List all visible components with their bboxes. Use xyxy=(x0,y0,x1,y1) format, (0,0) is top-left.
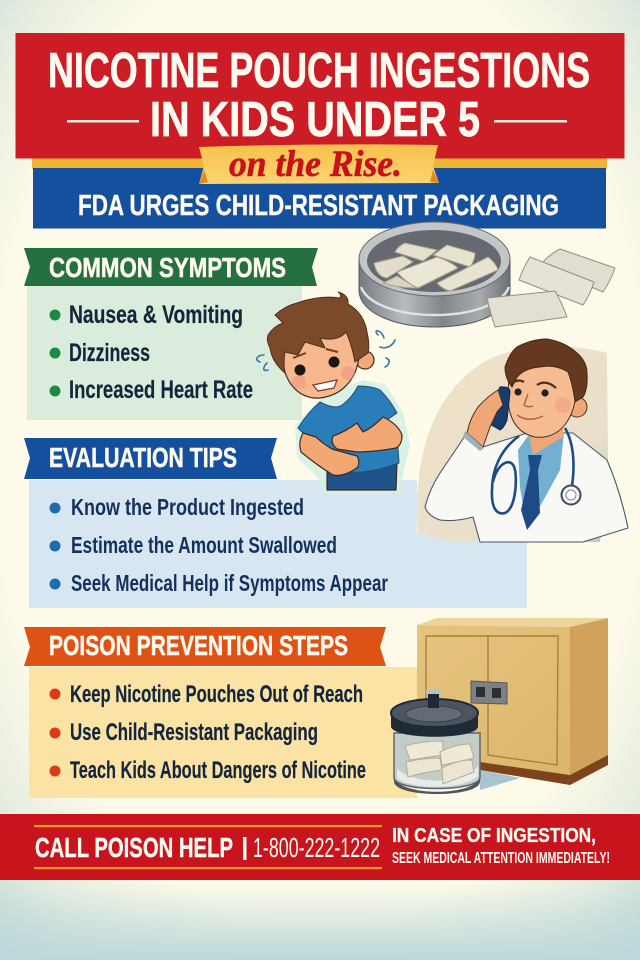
cabinet doors xyxy=(426,636,558,765)
ear xyxy=(356,351,374,369)
nose and mouth xyxy=(517,394,543,419)
neck xyxy=(527,420,563,455)
panel: common symptoms xyxy=(24,248,318,420)
icon: loose pouches xyxy=(487,249,615,327)
shirt xyxy=(518,432,564,530)
cabinet side xyxy=(570,618,608,775)
tips list: Know the Product Ingested xyxy=(71,494,304,520)
cabinet top xyxy=(417,618,608,627)
cabinet front xyxy=(417,625,570,775)
warning text: IN CASE OF INGESTION, xyxy=(392,825,596,847)
footer: call poison help xyxy=(0,814,640,880)
heading ribbon: EVALUATION TIPS xyxy=(49,442,237,473)
panel: poison prevention steps xyxy=(24,627,417,798)
prevention list: Keep Nicotine Pouches Out of Reach xyxy=(70,681,363,708)
heading ribbon xyxy=(24,627,386,666)
tips list xyxy=(50,494,388,596)
face xyxy=(508,361,576,437)
jar body xyxy=(394,733,480,788)
trousers xyxy=(327,462,397,490)
red title panel: IN KIDS UNDER 5 xyxy=(150,93,480,147)
cabinet lock xyxy=(471,681,507,704)
tie xyxy=(521,455,542,530)
cuff xyxy=(463,431,484,451)
brows xyxy=(293,349,338,358)
backdrop xyxy=(417,346,608,542)
prevention list: Teach Kids About Dangers of Nicotine xyxy=(70,757,366,784)
face xyxy=(283,328,359,398)
phone xyxy=(487,387,510,430)
upper arm and hand xyxy=(332,417,402,452)
hair xyxy=(505,339,587,402)
lower arm xyxy=(300,433,359,475)
tips list: Seek Medical Help if Symptoms Appear xyxy=(71,570,388,596)
heading ribbon: COMMON SYMPTOMS xyxy=(49,252,286,283)
jar lid xyxy=(391,713,478,737)
eyes xyxy=(294,364,306,376)
footer: call poison help: 1-800-222-1222 xyxy=(253,832,380,863)
heading ribbon xyxy=(24,248,318,286)
illustration: cabinet xyxy=(417,618,608,790)
sweat marks xyxy=(257,331,395,370)
phone line: CALL POISON HELP xyxy=(35,832,233,863)
blue subtitle band xyxy=(32,158,607,228)
heading ribbon: POISON PREVENTION STEPS xyxy=(49,630,348,661)
shirt xyxy=(298,386,399,473)
cabinet shadow xyxy=(480,770,520,790)
prevention list xyxy=(50,681,366,784)
mouth xyxy=(313,380,337,391)
pouches in jar xyxy=(405,741,444,760)
illustration: boy with stomach ache xyxy=(257,292,410,494)
icon: child-resistant jar xyxy=(391,690,480,794)
eyes and brows xyxy=(514,388,522,396)
cabinet plinth xyxy=(480,755,608,785)
stethoscope xyxy=(492,428,573,513)
symptom list: Dizziness xyxy=(69,339,150,367)
heading ribbon xyxy=(24,438,277,479)
header banner xyxy=(16,33,624,228)
tips list: Estimate the Amount Swallowed xyxy=(71,532,337,558)
gold ribbon: on the Rise: on the Rise. xyxy=(229,144,402,185)
symptom list: Increased Heart Rate xyxy=(69,376,253,404)
ear xyxy=(567,397,587,417)
red title panel xyxy=(16,33,624,158)
hand xyxy=(467,390,503,447)
prevention list: Use Child-Resistant Packaging xyxy=(70,719,318,746)
hair xyxy=(267,292,369,373)
symptom list: Nausea & Vomiting xyxy=(69,301,243,329)
illustration: doctor on phone xyxy=(417,339,628,542)
symptom list xyxy=(50,301,253,404)
panel: evaluation tips xyxy=(24,438,527,608)
coat xyxy=(425,433,628,542)
icon: nicotine pouch tin xyxy=(359,222,510,327)
